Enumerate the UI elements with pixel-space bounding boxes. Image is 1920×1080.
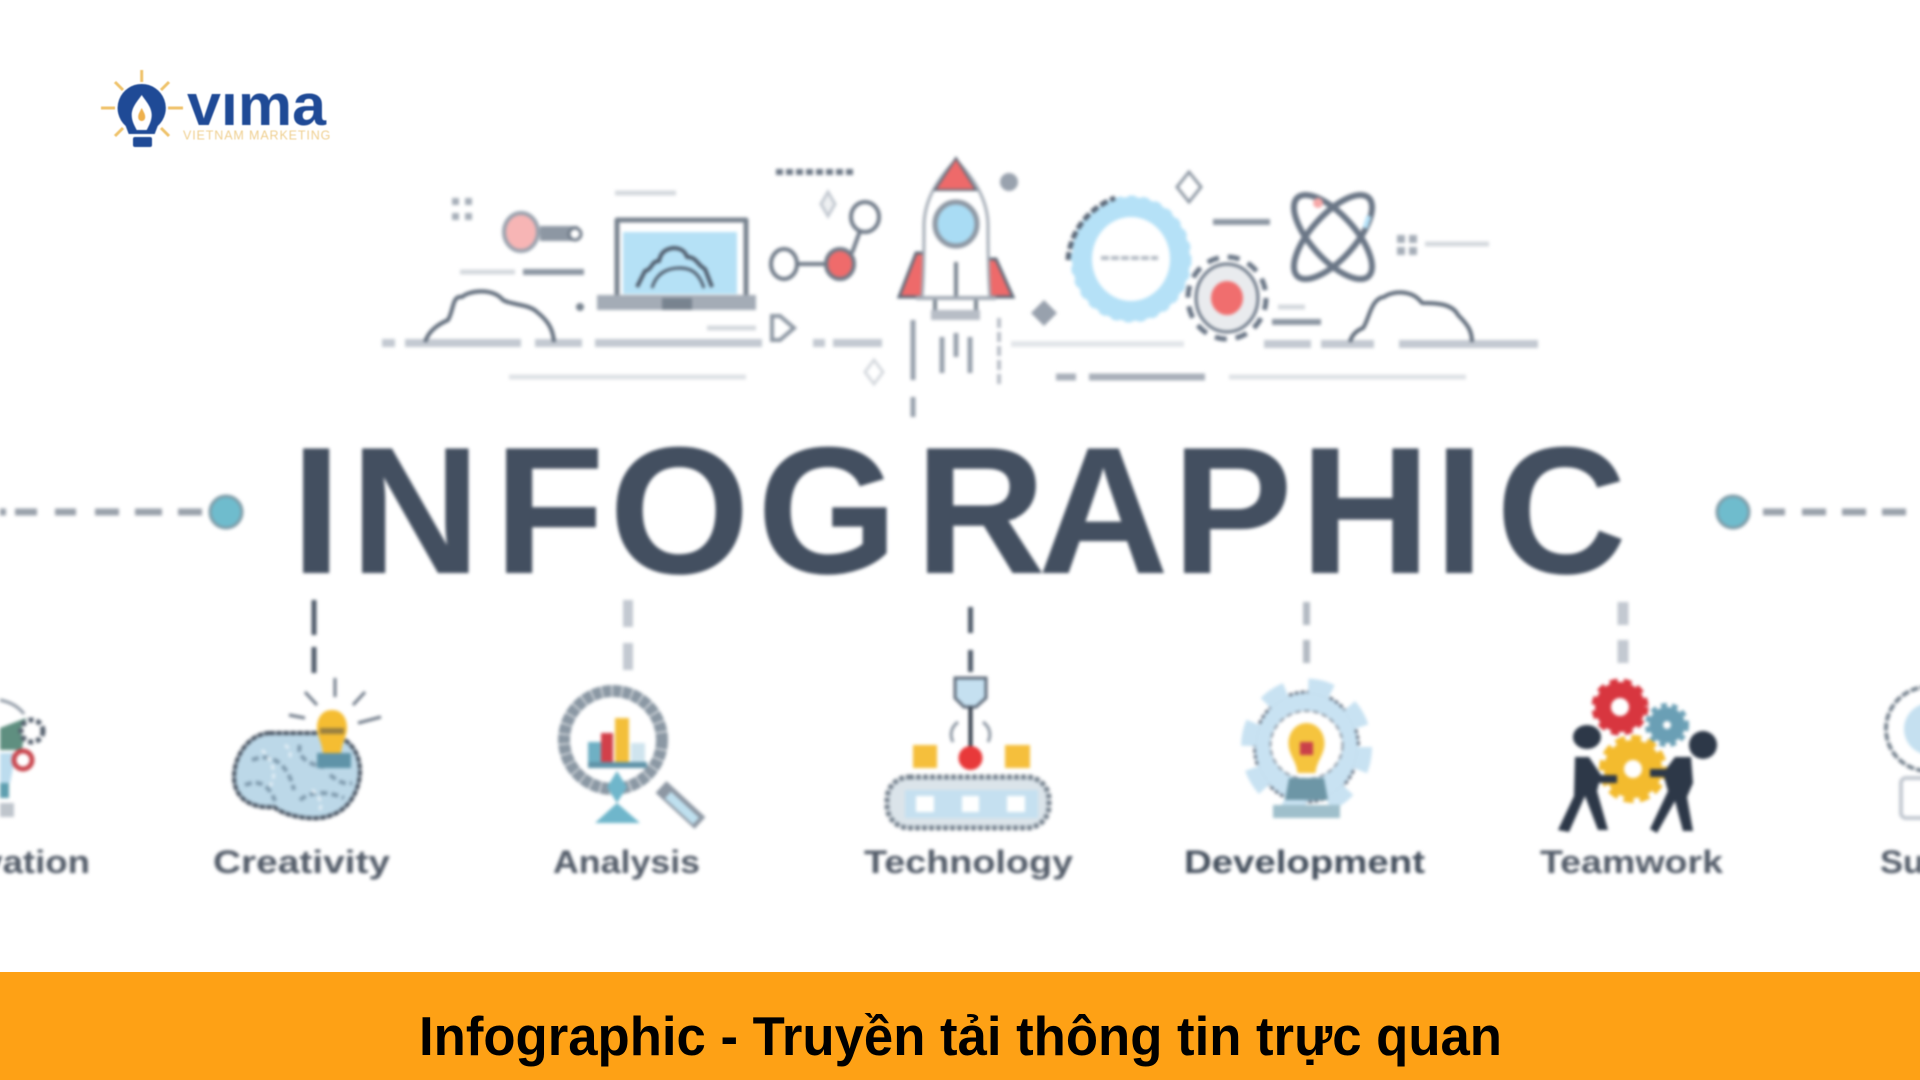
icon: people pushing gears [1558, 681, 1717, 833]
icon: bulb clipped [1886, 687, 1920, 818]
category: Innovation (clipped at left edge) [0, 700, 90, 880]
icon: molecule network [771, 192, 879, 279]
icon: play arrow [772, 316, 794, 340]
icon: small squares [452, 198, 1417, 255]
banner: caption bar [0, 972, 1920, 1080]
label: Teamwork: Teamwork [1540, 844, 1723, 880]
label: Development: Development [1184, 844, 1425, 880]
logo: VIMA Vietnam Marketing [101, 70, 331, 147]
icon: small grey cog [1000, 173, 1018, 191]
category: Creativity [213, 678, 390, 880]
category: Success (clipped at right edge) [1880, 687, 1920, 880]
hero illustration: top line art [382, 158, 1538, 417]
icon: logo light bulb [101, 70, 183, 147]
icon: laptop [576, 220, 756, 311]
category: Technology [864, 678, 1073, 880]
banner title: Infographic - Truyền tải thông tin trực quan [419, 1005, 1502, 1067]
icon: faint star [865, 360, 883, 384]
category: Development [1184, 686, 1425, 880]
icon: rocket [899, 158, 1013, 417]
logo tagline: VIETNAM MARKETING [183, 128, 331, 142]
vertical dashed connectors [314, 600, 1623, 673]
icon: right cloud [1350, 292, 1472, 342]
heading: INFOGRAPHIC wordmark: INFOGRAPHIC [291, 410, 1627, 612]
icon: left cloud [425, 291, 554, 342]
icon: diamond outline [1177, 172, 1201, 202]
category: Teamwork [1540, 681, 1723, 880]
icon: innovation [0, 700, 43, 817]
label: Analysis: Analysis [553, 844, 700, 880]
label: Creativity: Creativity [213, 844, 390, 880]
ground lines [382, 172, 1538, 377]
icon: key [504, 213, 581, 251]
connector: left dashed line with dot [0, 496, 242, 528]
logo wordmark: vıma [187, 73, 327, 138]
icon: big blue gear [1068, 198, 1188, 319]
icon: brain and bulb [234, 678, 381, 818]
connector: right dashed line with dot [1717, 496, 1906, 528]
icon: gear with bulb [1248, 686, 1364, 818]
icon: outlined gear with red centre [1188, 257, 1266, 339]
icon: grey diamond [1031, 300, 1057, 326]
label: Technology: Technology [864, 844, 1073, 880]
category: Analysis [553, 691, 700, 880]
icon: magnifier with chart [564, 691, 700, 823]
icon: conveyor and robot arm [887, 678, 1049, 828]
icon: atom [1281, 183, 1385, 291]
